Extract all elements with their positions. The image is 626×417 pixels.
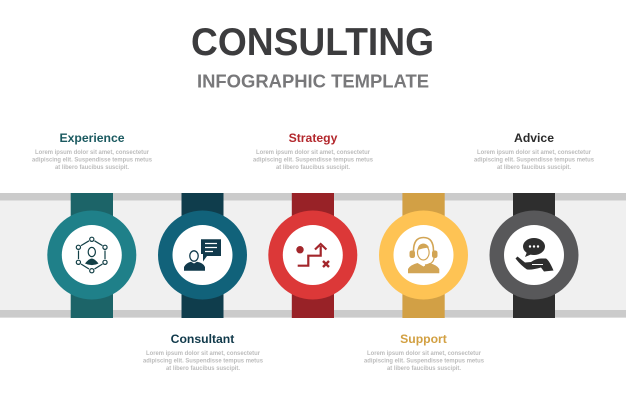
title: CONSULTING <box>191 21 434 64</box>
panel: consultant text <box>143 332 264 372</box>
icon: hand with speech bubble <box>516 238 554 272</box>
panel: strategy badge <box>268 193 357 318</box>
panel: advice text: adipiscing elit. Suspendisse tempus metus <box>474 156 595 164</box>
panel: experience text: Lorem ipsum dolor sit amet, consectetur <box>35 149 150 156</box>
panel: consultant text: Lorem ipsum dolor sit amet, consectetur <box>146 350 261 357</box>
panel: support badge <box>379 193 468 318</box>
panel: experience badge <box>47 193 136 318</box>
panel: advice text: Lorem ipsum dolor sit amet, consectetur <box>477 149 592 156</box>
panel: experience text: adipiscing elit. Suspendisse tempus metus <box>32 156 153 164</box>
panel: advice text <box>474 131 595 171</box>
panel: strategy text: Lorem ipsum dolor sit amet, consectetur <box>256 149 371 156</box>
panel: support text: Support <box>400 332 447 346</box>
subtitle: INFOGRAPHIC TEMPLATE <box>197 72 429 92</box>
panel: advice text: at libero faucibus suscipit. <box>497 164 571 171</box>
panel: support text: adipiscing elit. Suspendisse tempus metus <box>364 358 485 364</box>
panel: advice badge <box>490 193 578 318</box>
icon: strategy stairs <box>296 244 329 267</box>
panel: consultant badge <box>158 193 247 318</box>
panel: experience text: at libero faucibus suscipit. <box>55 164 129 171</box>
panel: consultant text: Consultant <box>171 332 234 346</box>
panel: experience text: Experience <box>59 131 125 145</box>
panel: strategy text: Strategy <box>289 131 338 145</box>
panel: experience text <box>32 131 153 171</box>
panel: support text: Lorem ipsum dolor sit amet, consectetur <box>367 350 482 357</box>
icon: network of people <box>76 237 107 273</box>
panel: strategy text: adipiscing elit. Suspendisse tempus metus <box>253 156 374 164</box>
panel: strategy text: at libero faucibus suscipit. <box>276 164 350 171</box>
background band <box>0 193 626 318</box>
panel: strategy text <box>253 131 374 171</box>
panel: consultant text: at libero faucibus suscipit. <box>166 365 240 372</box>
panel: support text <box>364 332 485 372</box>
icon: headset agent <box>408 238 439 273</box>
icon: person with speech bubble <box>184 239 221 271</box>
panel: advice text: Advice <box>514 131 554 145</box>
panel: consultant text: adipiscing elit. Suspendisse tempus metus <box>143 358 264 364</box>
panel: support text: at libero faucibus suscipit. <box>387 365 461 372</box>
